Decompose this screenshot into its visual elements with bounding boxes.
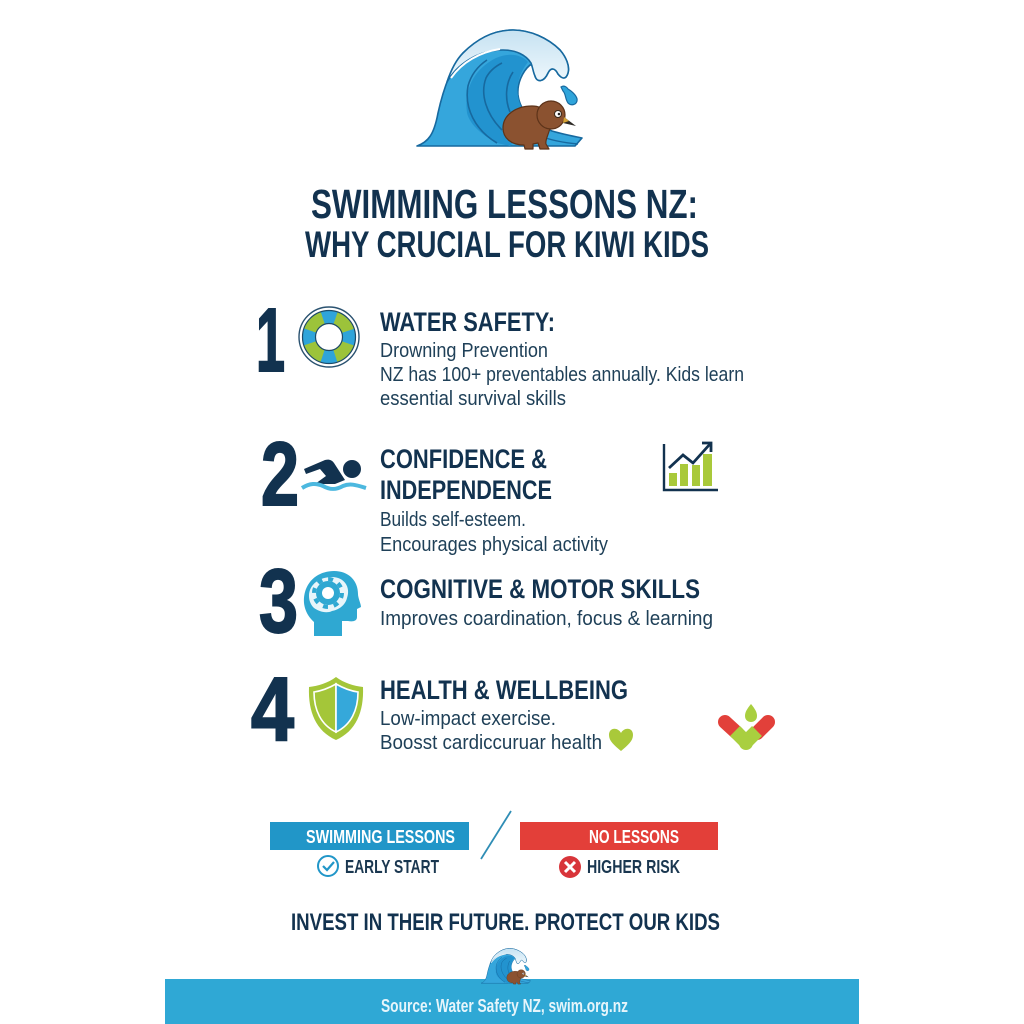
icon: swimmer [302,460,366,489]
icon: wave with kiwi [417,30,582,149]
heading: COGNITIVE & MOTOR SKILLS [380,574,700,604]
body text [380,340,744,410]
panel: water safety [256,291,744,410]
title: SWIMMING LESSONS NZ: [311,181,698,227]
body text [380,509,608,556]
panel: health and wellbeing [251,660,768,760]
icon: head with gear [304,571,361,636]
label: early start: EARLY START [345,857,439,877]
heading: HEALTH & WELLBEING [380,675,628,705]
body text: NZ has 100+ preventables annually. Kids learn [380,364,744,386]
footer bar [165,979,859,1024]
icon: check [318,856,338,876]
icon: health check with drop [725,704,768,750]
body text: Boosst cardiccuruar health [380,732,602,754]
number 4: 4 [251,660,294,760]
icon: life ring [299,307,359,367]
heading: WATER SAFETY: [380,307,555,337]
panel: confidence and independence [261,425,718,556]
heading: INDEPENDENCE [380,475,552,505]
panel: comparison swimming lessons [270,822,469,877]
divider slash [481,811,511,859]
icon: small wave with kiwi [481,948,530,984]
number 3: 3 [259,552,298,652]
banner: no lessons [520,822,718,850]
body text: Encourages physical activity [380,534,608,556]
heading [380,444,552,505]
icon: small heart [609,729,633,751]
body text: Builds self-esteem. [380,509,526,531]
call to action: INVEST IN THEIR FUTURE. PROTECT OUR KIDS [291,909,720,936]
banner: swimming lessons [270,822,469,850]
body text: essential survival skills [380,388,566,410]
number 1: 1 [256,291,285,391]
icon: cross [559,856,581,878]
body text [380,708,602,754]
heading: CONFIDENCE & [380,444,547,474]
title [305,181,709,265]
panel: comparison no lessons [520,822,718,878]
banner: no lessons: NO LESSONS [589,827,679,847]
icon: growth chart [664,443,718,490]
title: WHY CRUCIAL FOR KIWI KIDS [305,224,709,265]
label: higher risk: HIGHER RISK [587,857,680,877]
body text: Improves coardination, focus & learning [380,608,713,630]
icon: shield [309,677,363,740]
number 2: 2 [261,425,299,525]
source text: Source: Water Safety NZ, swim.org.nz [381,996,628,1016]
body text: Low-impact exercise. [380,708,556,730]
panel: cognitive and motor skills [259,552,713,652]
banner: swimming lessons: SWIMMING LESSONS [306,827,455,847]
body text: Drowning Prevention [380,340,548,362]
